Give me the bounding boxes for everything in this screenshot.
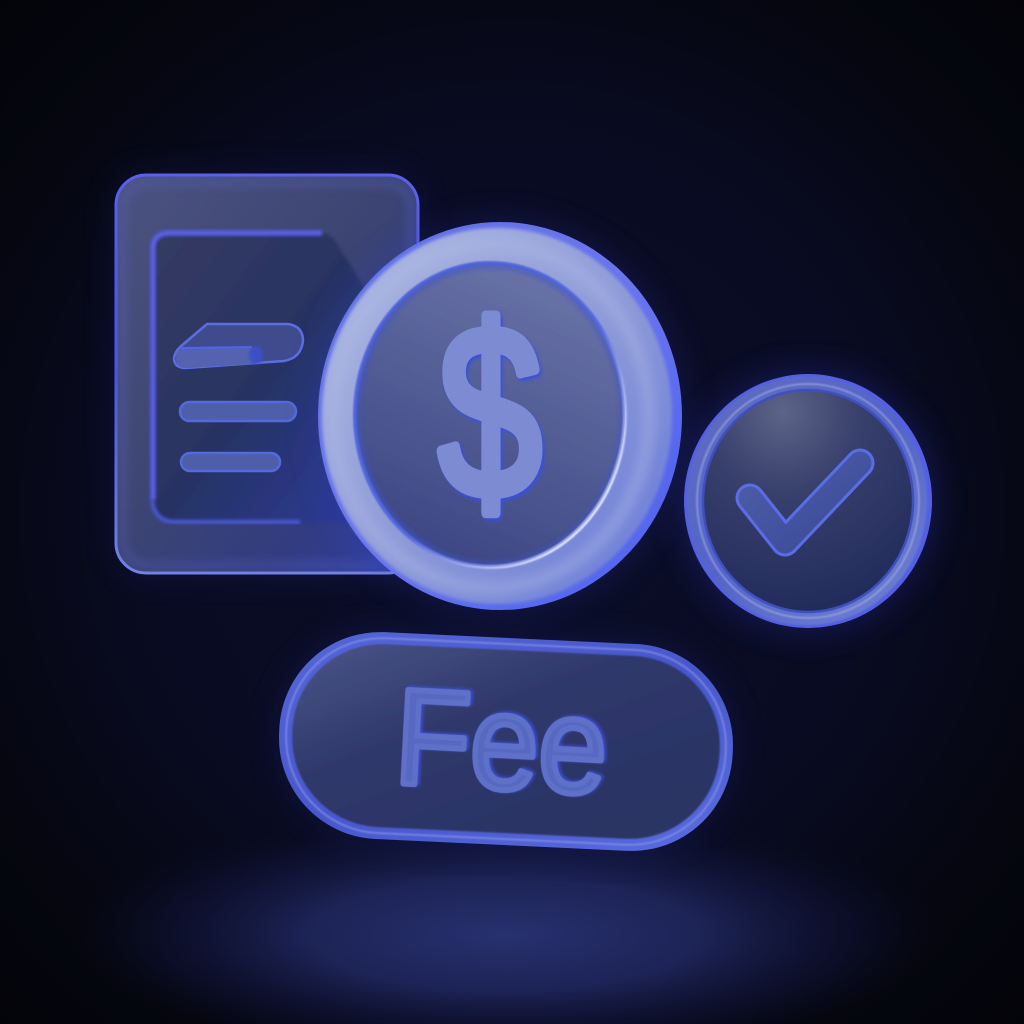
floor reflection: [65, 810, 945, 1024]
fee label: Fee: [391, 660, 611, 823]
icon: check badge: [683, 373, 933, 629]
dollar sign: $: [439, 275, 541, 548]
document inner page: [152, 233, 372, 522]
icon: dollar coin: [318, 222, 682, 610]
document line 3: [181, 453, 280, 471]
check mark: [750, 463, 860, 542]
icon: document card: [116, 175, 418, 573]
document line 2: [180, 402, 296, 421]
fee pill: [274, 627, 738, 856]
document line 1: [174, 324, 303, 368]
